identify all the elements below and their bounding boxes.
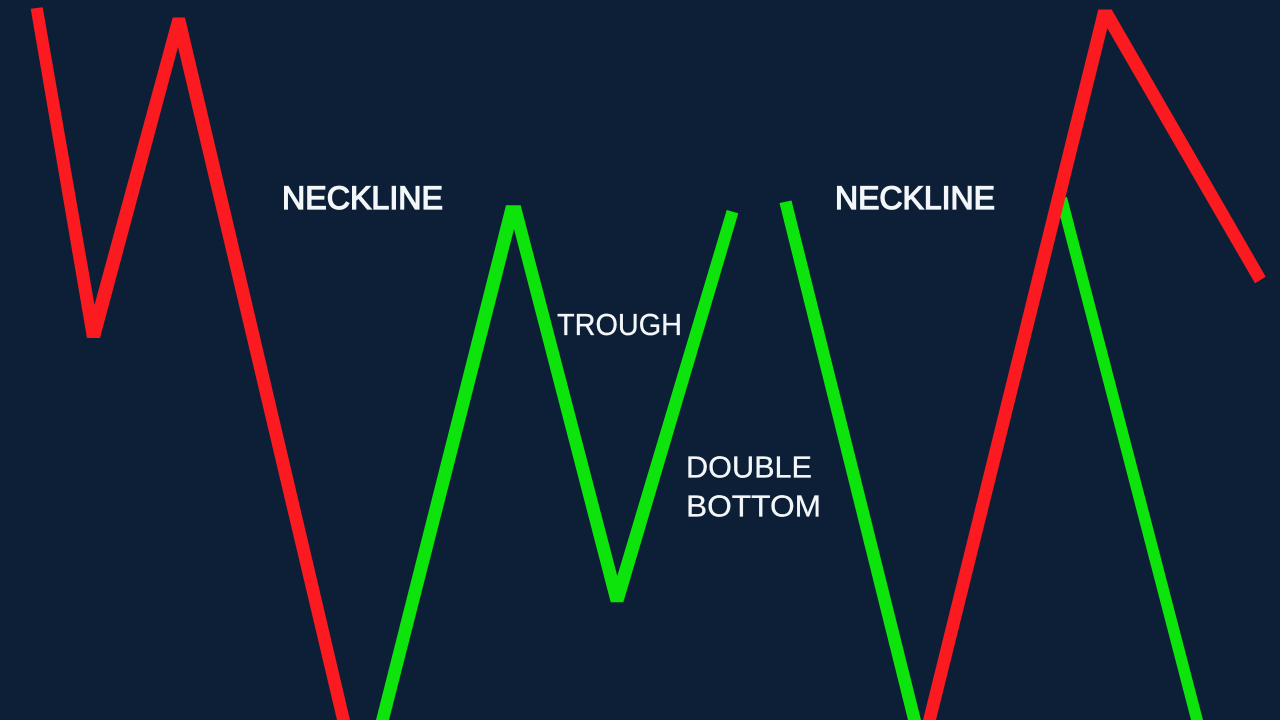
green price line: double bottom <box>376 205 738 720</box>
label: left neckline: NECKLINE <box>282 180 443 216</box>
red price line: left downtrend <box>31 7 350 720</box>
label: right neckline: NECKLINE <box>835 180 995 216</box>
red price line: right rally <box>923 10 1266 720</box>
green price line: right drop <box>1056 197 1203 720</box>
label: double bottom: BOTTOM <box>686 488 821 524</box>
green price line: drop after neckline <box>780 200 921 720</box>
label: trough: TROUGH <box>557 307 682 342</box>
label: double bottom <box>686 450 821 524</box>
label: double bottom: DOUBLE <box>686 450 812 484</box>
